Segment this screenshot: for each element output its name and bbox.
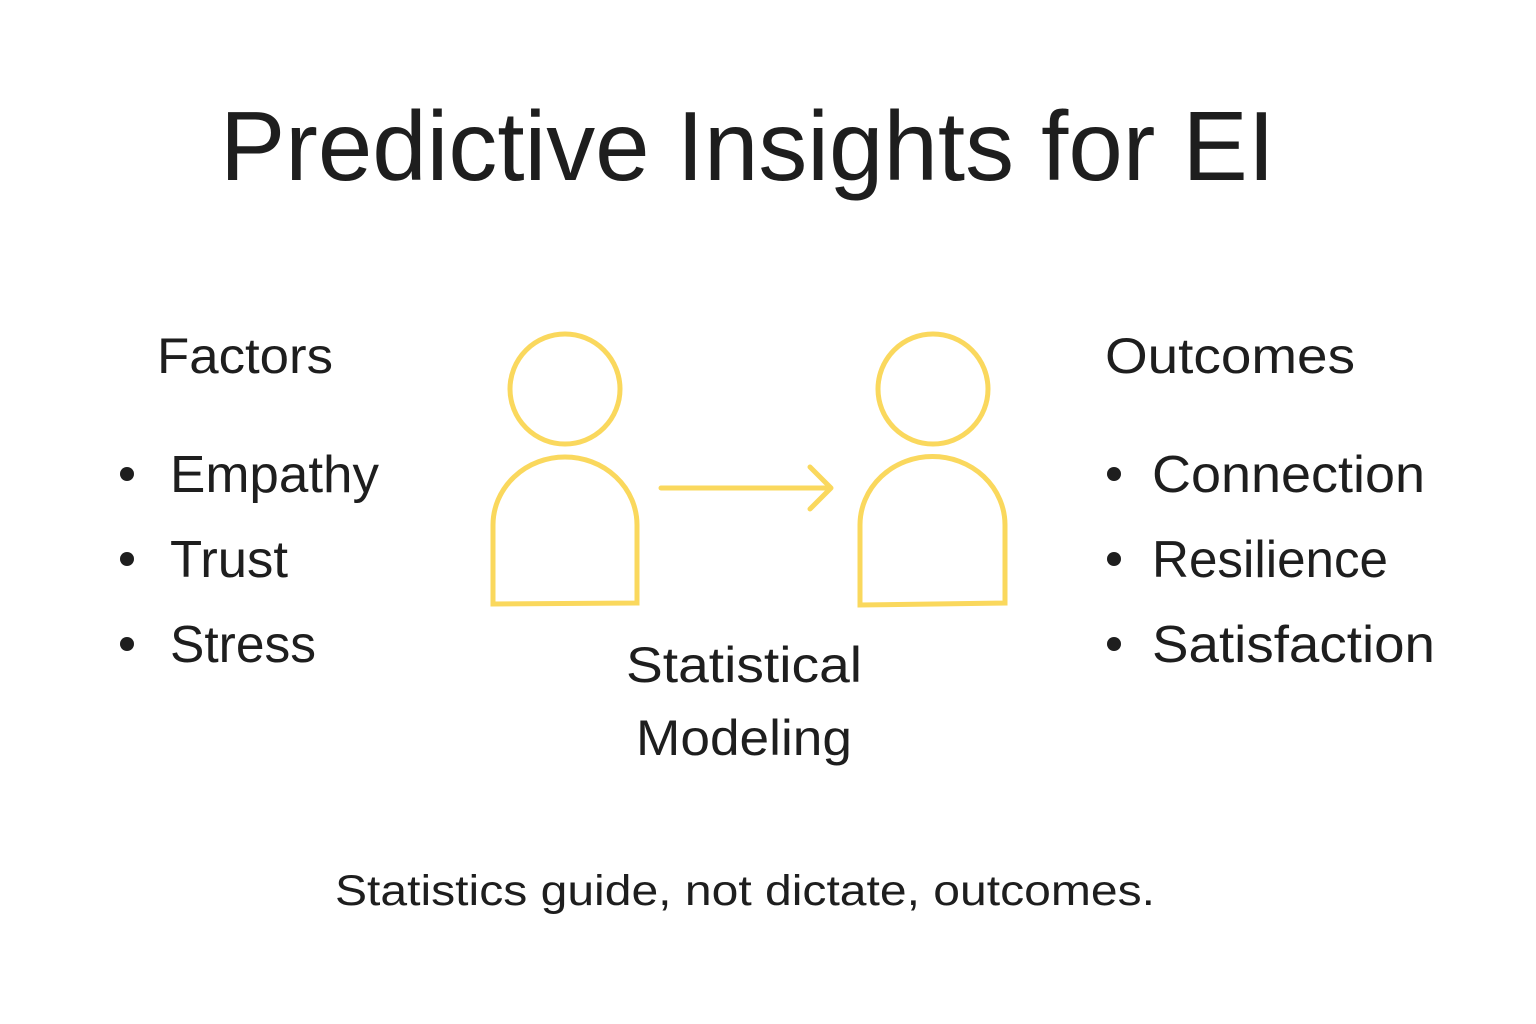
- list: outcomes: Resilience: [1152, 531, 1388, 589]
- arrow: [661, 467, 831, 509]
- heading: factors: Factors: [157, 328, 333, 384]
- label: statistical modeling: [626, 637, 862, 766]
- icon: person right: [860, 334, 1005, 605]
- label: statistical modeling: Modeling: [636, 710, 852, 766]
- icon: person left: [493, 334, 637, 604]
- panel: outcomes: [1105, 328, 1435, 674]
- list: outcomes: Satisfaction: [1152, 616, 1435, 674]
- list: factors: Stress: [170, 616, 316, 674]
- list: factors: Trust: [170, 531, 289, 589]
- list: outcomes: [1107, 446, 1435, 674]
- list: factors: [120, 446, 379, 674]
- title: Predictive Insights for EI: [220, 91, 1275, 201]
- heading: outcomes: Outcomes: [1105, 328, 1355, 384]
- label: statistical modeling: Statistical: [626, 637, 862, 693]
- list: factors: Empathy: [170, 446, 379, 504]
- panel: factors: [120, 328, 379, 674]
- list: outcomes: Connection: [1152, 446, 1425, 504]
- footer caption: Statistics guide, not dictate, outcomes.: [335, 867, 1155, 915]
